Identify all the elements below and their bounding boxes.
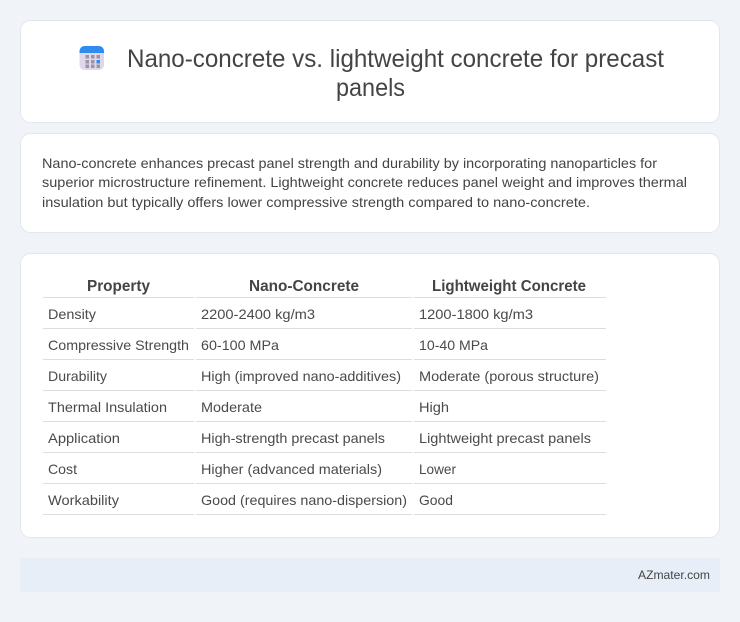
title: panels (336, 74, 405, 102)
table header: Property (87, 278, 150, 295)
row: density: 1200-1800 kg/m3 (419, 306, 533, 322)
row: compressive strength: 10-40 MPa (419, 337, 488, 353)
row: thermal insulation: High (419, 399, 449, 415)
table header: Lightweight Concrete (432, 278, 586, 295)
table rules (43, 298, 606, 514)
row: durability: Moderate (porous structure) (419, 368, 599, 384)
panel: comparison table card (20, 254, 720, 538)
icon: calendar (80, 46, 104, 70)
title (127, 45, 664, 102)
footer source text: AZmater.com (638, 568, 710, 582)
row: cost: Lower (419, 461, 456, 477)
row: cost (48, 461, 456, 477)
row: workability (48, 492, 453, 508)
row: workability: Good (requires nano-dispersion) (201, 492, 407, 508)
table header (87, 278, 586, 295)
row: density (48, 306, 533, 322)
row: durability: High (improved nano-additives) (201, 368, 401, 384)
row: application: Lightweight precast panels (419, 430, 591, 446)
row: thermal insulation: Moderate (201, 399, 262, 415)
row: durability (48, 368, 599, 384)
summary text: insulation but typically offers lower compressive strength compared to nano-concrete. (42, 194, 590, 210)
row: application (48, 430, 591, 446)
row: compressive strength (48, 337, 488, 353)
row: workability: Workability (48, 492, 119, 508)
panel: summary card (20, 134, 720, 232)
row: compressive strength: 60-100 MPa (201, 337, 279, 353)
summary text: superior microstructure refinement. Lightweight concrete reduces panel weight and improves thermal (42, 174, 687, 190)
summary text: Nano-concrete enhances precast panel strength and durability by incorporating nanoparticles for (42, 155, 657, 171)
panel: title card (20, 20, 720, 122)
row: compressive strength: Compressive Strength (48, 337, 189, 353)
row: durability: Durability (48, 368, 107, 384)
row: workability: Good (419, 492, 453, 508)
table header: Nano-Concrete (249, 278, 359, 295)
row: cost: Higher (advanced materials) (201, 461, 382, 477)
row: cost: Cost (48, 461, 77, 477)
row: density: Density (48, 306, 96, 322)
row: thermal insulation (48, 399, 449, 415)
title: Nano-concrete vs. lightweight concrete for precast (127, 45, 664, 73)
footer bar (20, 558, 720, 592)
row: density: 2200-2400 kg/m3 (201, 306, 315, 322)
row: application: High-strength precast panels (201, 430, 385, 446)
row: application: Application (48, 430, 120, 446)
summary text (42, 155, 687, 210)
row: thermal insulation: Thermal Insulation (48, 399, 167, 415)
